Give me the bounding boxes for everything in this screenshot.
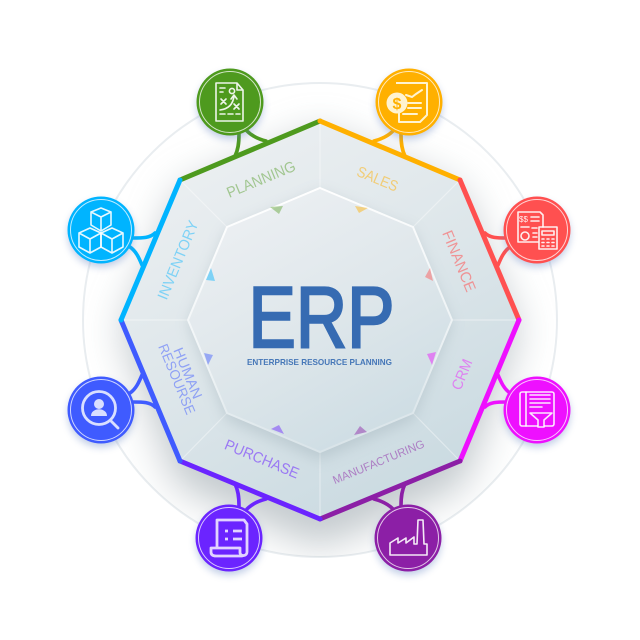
icon: crm [504,376,570,444]
label: human resourse: RESOURSE [155,341,199,417]
label: inventory: INVENTORY [155,218,202,302]
coloured octagon edges [121,121,519,519]
icon badge shadows [68,73,570,575]
label: purchase: PURCHASE [222,436,301,482]
segment pointers [204,206,436,435]
icon: finance: $$ [519,215,528,224]
icon: purchase [196,504,262,572]
label: sales: SALES [354,163,400,196]
icon: finance [504,196,570,264]
label: planning: PLANNING [224,158,298,202]
segment dividers [121,121,519,519]
icon: human resource [68,376,134,444]
icon: planning [196,68,264,136]
outer ring [83,83,557,557]
subtitle: ENTERPRISE RESOURCE PLANNING [247,357,392,367]
inner octagon shadow [188,192,452,460]
octagon panel [121,121,519,519]
icon: manufacturing [374,504,442,572]
icon: inventory [68,196,134,264]
label: finance: FINANCE [438,228,479,295]
connectors [130,131,510,509]
octagon shadow [121,131,519,548]
title: ERP: ERP [248,270,394,366]
label: human resourse: HUMAN [170,345,206,401]
inner octagon [188,188,452,452]
label: crm: CRM [448,357,476,393]
icon: sales: $ [393,96,402,113]
icon: sales [376,68,442,136]
label: manufacturing: MANUFACTURING [331,438,426,487]
